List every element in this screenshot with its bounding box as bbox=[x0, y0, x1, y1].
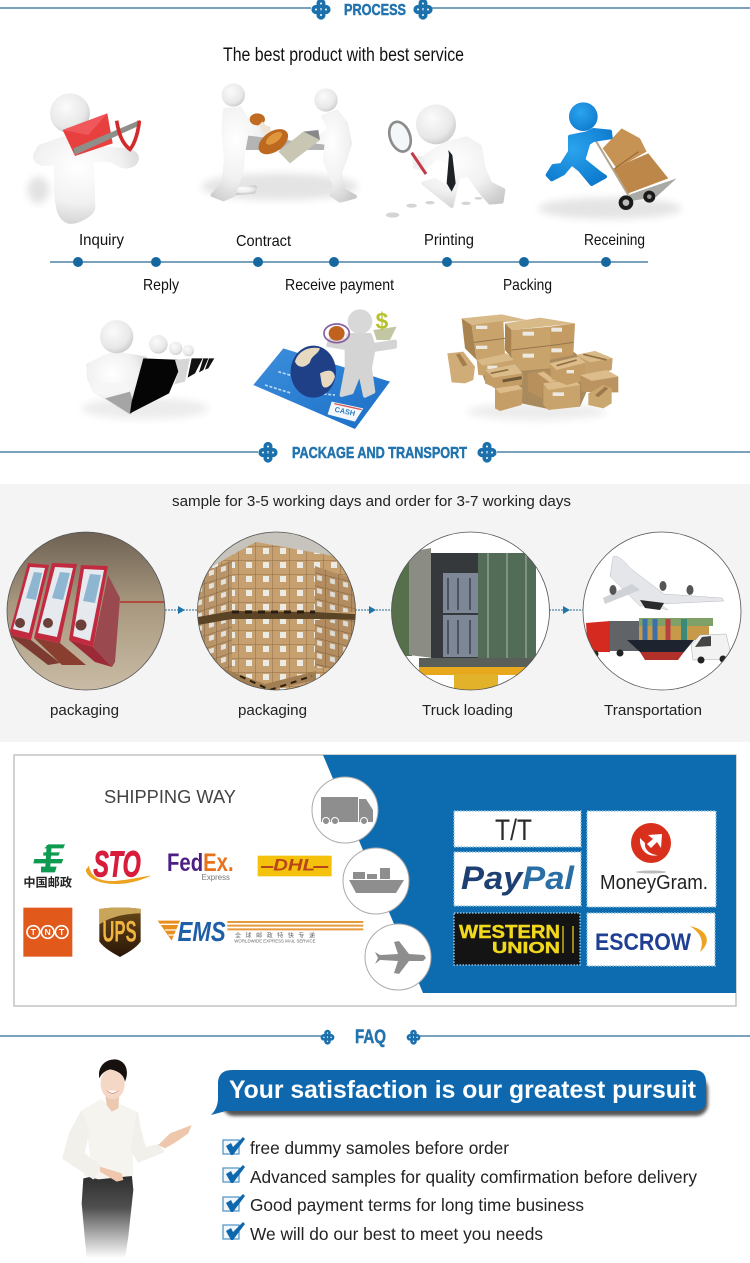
photo captions: Truck loading bbox=[422, 702, 513, 719]
subtitle: The best product with best service bbox=[223, 45, 464, 66]
check item 2: Advanced samples for quality comfirmation before delivery bbox=[250, 1167, 697, 1187]
photo: palletised cartons bbox=[195, 530, 360, 695]
payment: PayPal: PayPal bbox=[461, 860, 575, 896]
logo: UPS bbox=[99, 907, 141, 957]
icon: receive payment card with globe and figure bbox=[253, 308, 397, 429]
logo: China Post: 中国邮政 bbox=[23, 874, 72, 891]
icon: ship in circle bbox=[343, 848, 409, 914]
logo: FedEx: FedEx. bbox=[167, 850, 234, 877]
payment: Escrow: ESCROW bbox=[595, 929, 691, 956]
heading: shipping way: SHIPPING WAY bbox=[104, 787, 236, 807]
panel: shipping way and payment bbox=[14, 755, 736, 1006]
arrow: packaging to truck loading bbox=[355, 606, 392, 614]
payment: Western Union: UNION bbox=[492, 940, 560, 957]
photo: transportation plane truck ship van bbox=[580, 530, 745, 695]
process step labels: Receive payment bbox=[285, 277, 394, 294]
panel: package and transport band bbox=[0, 484, 750, 742]
logo: STO: STO bbox=[93, 843, 141, 884]
header: process: PROCESS bbox=[344, 2, 406, 19]
logo: TNT: T bbox=[31, 927, 37, 937]
payment: MoneyGram bbox=[587, 811, 716, 907]
photo: packaging red boxes bbox=[0, 530, 170, 695]
process step labels bbox=[79, 232, 645, 294]
check item 4: We will do our best to meet you needs bbox=[250, 1224, 543, 1244]
back right stack bbox=[505, 318, 575, 372]
payment: T/T: T/T bbox=[495, 814, 532, 847]
payment: PayPal bbox=[454, 852, 581, 906]
photo: truck loading container bbox=[390, 530, 555, 695]
icon: truck in circle bbox=[312, 777, 378, 843]
photo captions bbox=[50, 702, 702, 719]
process step labels: Contract bbox=[236, 233, 292, 250]
logo: EMS: WORLDWIDE EXPRESS MAIL SERVICE bbox=[234, 938, 316, 943]
arrow: packaging to packaging bbox=[165, 606, 198, 614]
payment: MoneyGram: MoneyGram. bbox=[600, 872, 708, 894]
icon: stacked cardboard boxes bbox=[447, 314, 618, 420]
header: process bbox=[0, 1, 750, 19]
process step labels: Inquiry bbox=[79, 232, 124, 249]
logo: DHL bbox=[258, 855, 332, 876]
logo: TNT bbox=[23, 908, 72, 957]
check item 3: Good payment terms for long time business bbox=[250, 1195, 584, 1215]
icon: printing figure with magnifier bbox=[385, 104, 503, 218]
icon: reply figures at laptops bbox=[82, 320, 214, 419]
icon: contract figures bbox=[202, 83, 358, 201]
payment: T/T bbox=[454, 811, 581, 847]
logo: TNT: T bbox=[59, 927, 65, 937]
photo captions: packaging bbox=[238, 702, 307, 719]
header: FAQ: FAQ bbox=[355, 1027, 386, 1048]
photo captions: packaging bbox=[50, 702, 119, 719]
logo: TNT: N bbox=[45, 927, 51, 937]
loose carton left bbox=[447, 352, 475, 383]
process step labels: Packing bbox=[503, 277, 552, 294]
arrow: truck loading to transportation bbox=[549, 606, 583, 614]
logo: FedEx: Express bbox=[202, 872, 231, 882]
process step labels: Reply bbox=[143, 277, 179, 294]
callout: satisfaction banner bbox=[211, 1070, 708, 1116]
payment: Western Union bbox=[454, 913, 580, 965]
logo: EMS: 全球邮政特快专递 bbox=[235, 931, 315, 940]
logo: China Post bbox=[23, 844, 72, 891]
process step labels: Printing bbox=[424, 232, 474, 249]
process step labels: Receining bbox=[584, 232, 645, 249]
check item 1: free dummy samoles before order bbox=[250, 1138, 509, 1158]
logo: EMS bbox=[158, 916, 363, 947]
photo captions: Transportation bbox=[604, 702, 702, 719]
logo: EMS: EMS bbox=[178, 916, 226, 947]
callout: satisfaction banner: Your satisfaction is our greatest pursuit bbox=[229, 1076, 697, 1104]
icon: inquiry figure with envelope slingshot bbox=[28, 93, 141, 222]
band caption: sample for 3-5 working days and order for 3-7 working days bbox=[172, 493, 571, 510]
back left stack bbox=[462, 314, 527, 360]
header: package and transport bbox=[0, 444, 750, 462]
icon: receiving blue figure with hand truck bbox=[538, 102, 682, 219]
icon: plane in circle bbox=[365, 924, 431, 990]
payment: Western Union: WESTERN bbox=[459, 922, 560, 942]
header: package and transport: PACKAGE AND TRANSPORT bbox=[292, 445, 467, 462]
logo: UPS: UPS bbox=[102, 916, 137, 949]
payment: Escrow bbox=[587, 913, 715, 966]
illustration: customer service woman bbox=[63, 1059, 192, 1258]
checklist bbox=[223, 1137, 697, 1244]
logo: DHL: DHL bbox=[273, 855, 315, 874]
timeline bbox=[50, 257, 648, 267]
header: FAQ bbox=[0, 1027, 750, 1048]
icon: receive payment card with globe and figure: $ bbox=[376, 308, 389, 334]
icon: receive payment card with globe and figure: CASH bbox=[334, 405, 356, 418]
centre cartons bbox=[477, 353, 514, 376]
